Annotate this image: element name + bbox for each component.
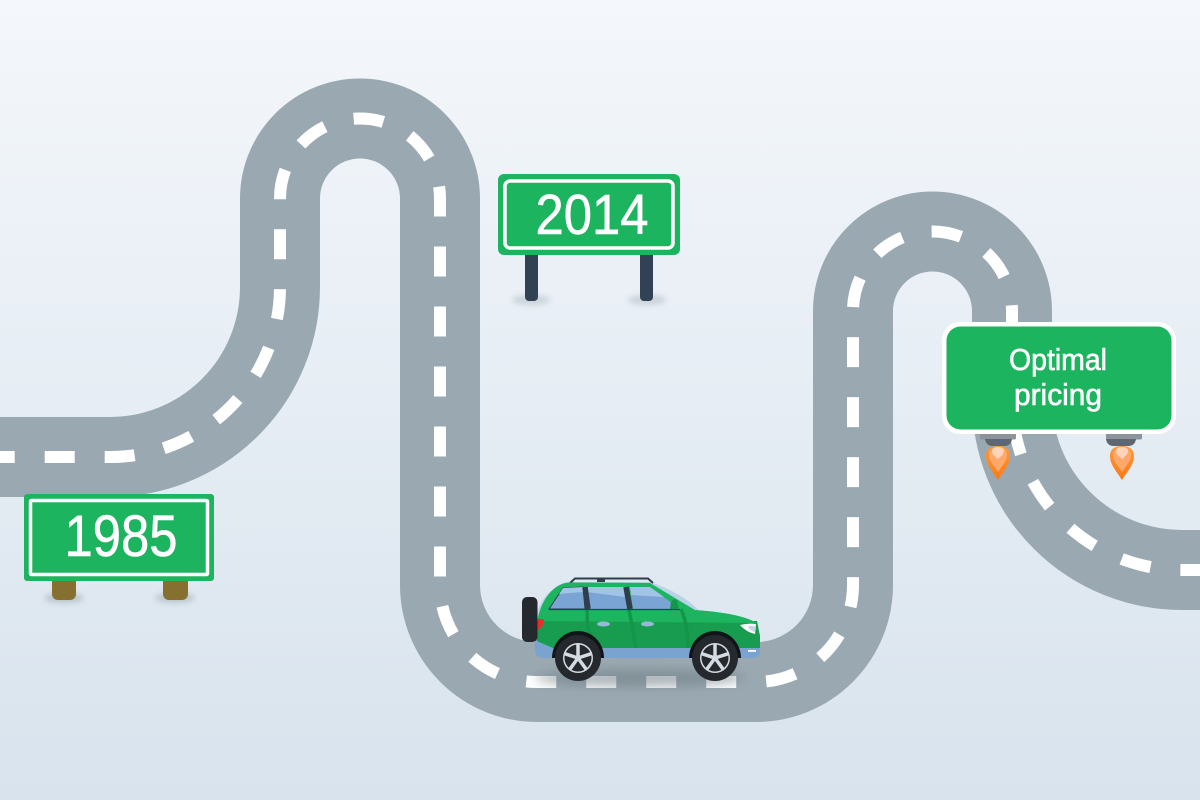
rocket sign: Optimal pricing: pricing [1014, 377, 1102, 412]
car shadow [535, 669, 745, 687]
right thruster [1106, 432, 1142, 480]
windows [549, 587, 585, 609]
headlight [740, 624, 756, 634]
windshield outline [536, 583, 698, 620]
window pillars [585, 587, 630, 609]
sign: 1985 [24, 494, 214, 603]
sign: 2014: 2014 [536, 183, 648, 247]
wheel arches [552, 631, 741, 658]
spare tyre [522, 597, 538, 642]
car body [537, 582, 760, 648]
rocket sign: Optimal pricing: Optimal [1009, 342, 1107, 377]
rocket sign: Optimal pricing [942, 322, 1176, 480]
tail light [538, 619, 544, 630]
roof rack [570, 578, 653, 583]
mirror [670, 599, 679, 609]
rear wheel [555, 635, 601, 681]
winding road [0, 118, 1200, 682]
door handles [597, 622, 610, 626]
sign: 1985: 1985 [64, 504, 178, 569]
door seams [587, 609, 688, 648]
sign: 2014 [498, 174, 680, 305]
car [522, 578, 760, 687]
car skirt [535, 640, 760, 658]
front wheel [692, 635, 738, 681]
left thruster [980, 432, 1016, 480]
